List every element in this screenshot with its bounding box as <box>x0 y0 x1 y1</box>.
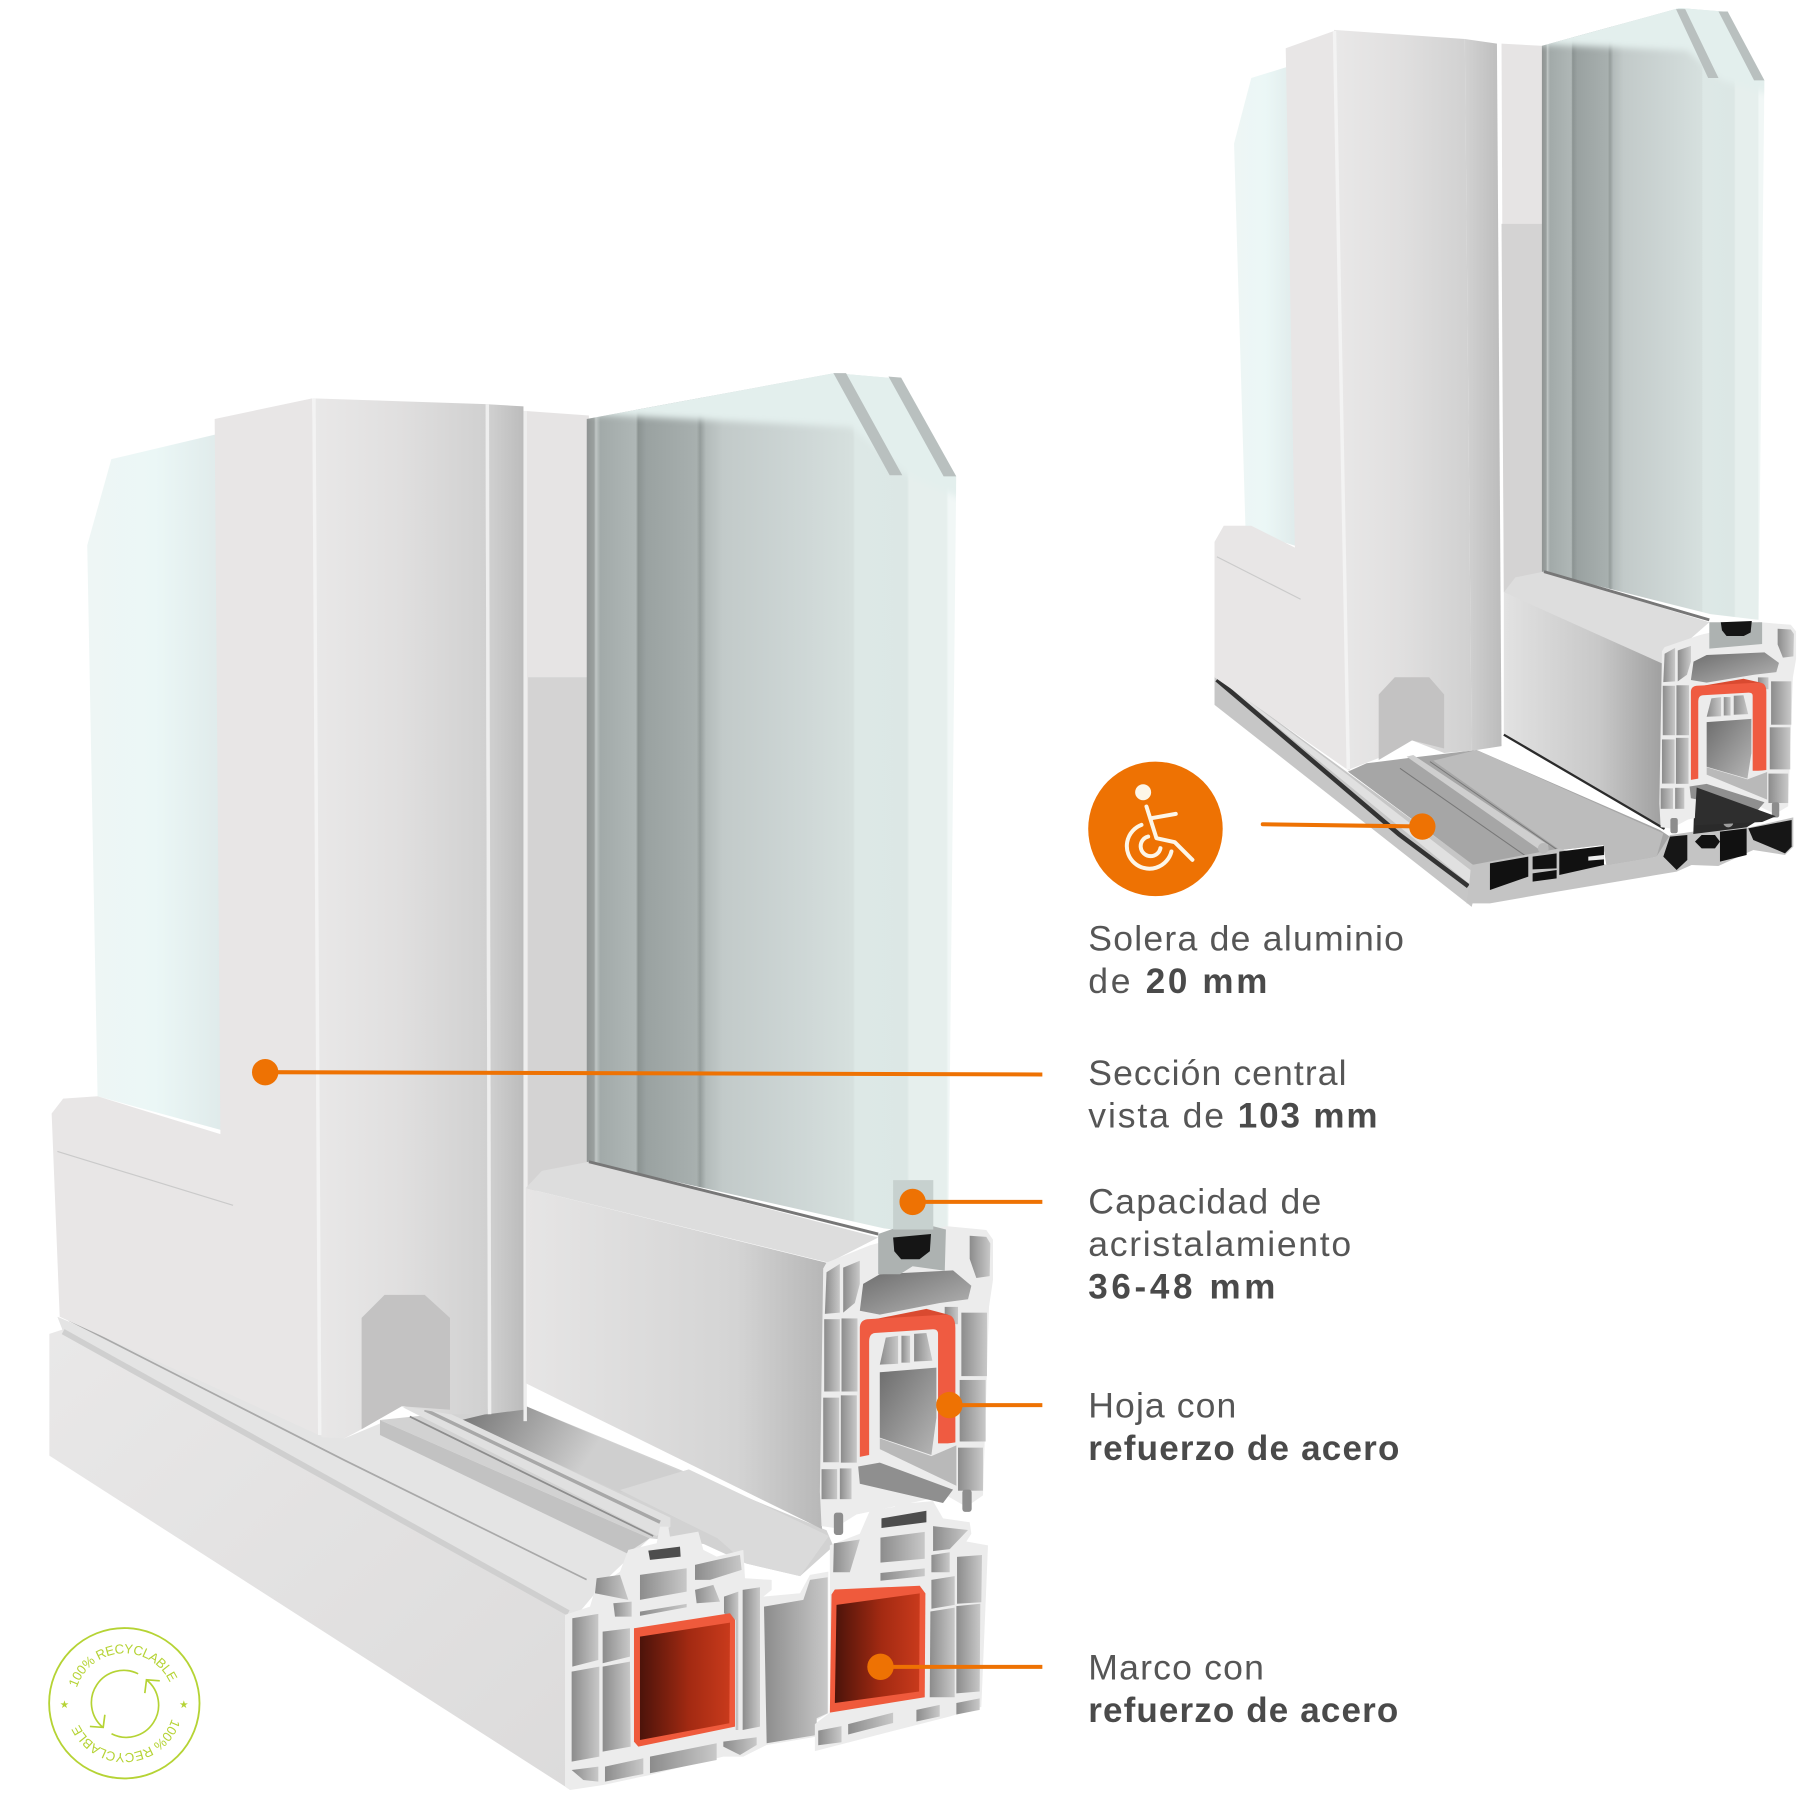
wheel carriage block <box>362 1295 450 1429</box>
spacer bar <box>1709 621 1762 649</box>
glass pane behind the left sash <box>87 434 224 1131</box>
narrow interlock strip <box>486 404 523 1414</box>
text: Marco con refuerzo de acero <box>1088 1647 1398 1730</box>
text: Capacidad de acristalamiento 36-48 mm <box>1088 1181 1351 1306</box>
callout: Hoja con refuerzo pointer <box>936 1392 1042 1418</box>
spacer bar and glass base <box>878 1180 946 1274</box>
lower sash top bevel <box>526 1162 878 1263</box>
double glazing <box>1542 8 1764 620</box>
callout: Marco con refuerzo pointer <box>867 1654 1042 1680</box>
left frame cross-section and central valley <box>565 1527 828 1790</box>
text: Sección central vista de 103 mm: vista de 103 mm <box>1088 1095 1378 1135</box>
text: Hoja con refuerzo de acero: refuerzo de acero <box>1088 1429 1399 1468</box>
secondary aluminium-sill window illustration <box>1215 0 1796 907</box>
left glass pane <box>1234 67 1297 546</box>
icon: wheelchair accessibility badge <box>1088 762 1223 896</box>
badge: 100% recyclable seal: ★ <box>179 1700 188 1711</box>
callout: Capacidad de acristalamiento pointer <box>899 1189 1042 1215</box>
narrow interlock strip <box>1465 39 1502 751</box>
main sash face <box>1334 30 1472 769</box>
sash light edge <box>312 398 321 1435</box>
callout: Sección central pointer <box>252 1059 1042 1085</box>
central mullion <box>1502 44 1545 592</box>
text: Hoja con refuerzo de acero: Hoja con <box>1088 1386 1236 1426</box>
text: Solera de aluminio de 20 mm: de 20 mm <box>1088 961 1267 1001</box>
lower sash top bevel <box>1504 572 1709 664</box>
left sash <box>1215 31 1350 771</box>
text: Sección central vista de 103 mm: Sección central <box>1088 1053 1347 1093</box>
text: Marco con refuerzo de acero: Marco con <box>1088 1647 1264 1687</box>
sash cross-section <box>1659 622 1796 833</box>
glass bevel edges <box>833 373 956 476</box>
left rail seam <box>1217 557 1301 599</box>
sash cross-section <box>820 1226 993 1535</box>
right frame cross-section <box>815 1490 988 1751</box>
text: Capacidad de acristalamiento 36-48 mm: acristalamiento <box>1088 1224 1351 1264</box>
dark weather brush channel <box>1694 788 1776 825</box>
badge: 100% recyclable seal: ★ <box>60 1700 69 1711</box>
glass bevel edges <box>1676 9 1764 80</box>
left sash <box>52 398 324 1437</box>
main window illustration <box>49 356 993 1790</box>
aluminium sill top surface and section <box>1348 750 1793 903</box>
lower sash face <box>526 1188 827 1529</box>
badge: 100% recyclable seal <box>48 1627 200 1780</box>
text: Capacidad de acristalamiento 36-48 mm: Capacidad de <box>1088 1181 1321 1221</box>
bottom frame track surface <box>57 1317 833 1619</box>
text: Sección central vista de 103 mm <box>1088 1053 1378 1135</box>
text: Capacidad de acristalamiento 36-48 mm: 36-48 mm <box>1088 1267 1275 1306</box>
wheel carriage block <box>1379 677 1444 760</box>
main sash face <box>313 398 488 1438</box>
badge: 100% recyclable seal: 100% RECYCLABLE <box>71 1720 180 1762</box>
text: Solera de aluminio de 20 mm: Solera de aluminio <box>1088 919 1404 959</box>
bottom frame rail face <box>49 1329 568 1789</box>
text: Solera de aluminio de 20 mm <box>1088 919 1404 1001</box>
double glazing <box>586 373 956 1230</box>
badge: 100% recyclable seal: 100% RECYCLABLE <box>70 1644 178 1687</box>
central mullion <box>526 411 589 1194</box>
text: Marco con refuerzo de acero: refuerzo de acero <box>1088 1691 1398 1730</box>
left sash rail seam <box>57 1151 233 1205</box>
callout: Solera de aluminio pointer <box>1263 813 1436 840</box>
aluminium sill side and dark gasket <box>1215 675 1481 907</box>
glazing bead dark line <box>589 1162 878 1234</box>
text: Hoja con refuerzo de acero <box>1088 1386 1399 1468</box>
lower sash face <box>1504 592 1662 829</box>
